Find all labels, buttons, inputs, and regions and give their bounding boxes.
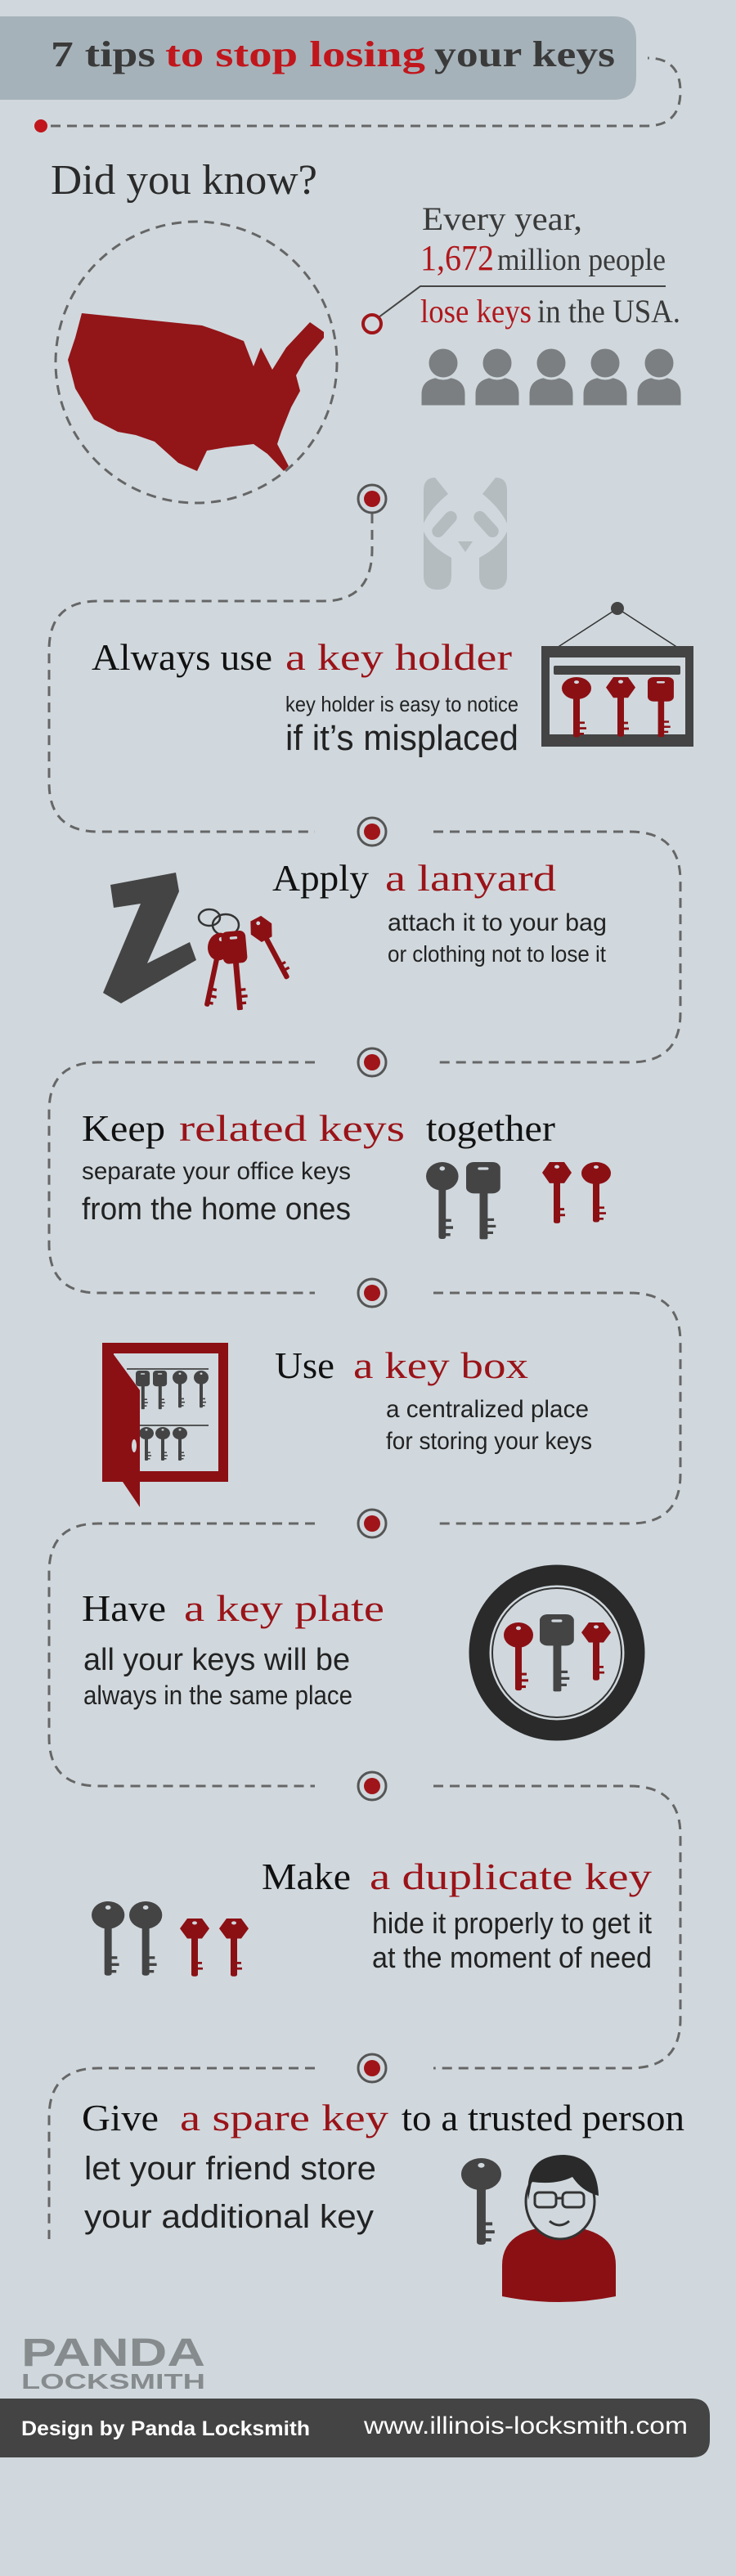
statistic text: lose keys <box>420 293 532 330</box>
tip 3: related keys: separate your office keys <box>82 1158 351 1185</box>
icon: key holder <box>541 602 693 747</box>
tip 6: duplicate key: a duplicate key <box>370 1856 652 1897</box>
tip 2: lanyard <box>272 857 607 967</box>
tip 5: key plate: always in the same place <box>83 1681 352 1710</box>
tip 7: spare key <box>82 2097 684 2235</box>
statistic text: Every year, <box>422 200 582 237</box>
targets <box>358 485 386 2082</box>
tip 5: key plate <box>82 1587 384 1710</box>
logo: panda locksmith: LOCKSMITH <box>21 2369 205 2394</box>
tip 1: key holder: Always use <box>92 636 272 678</box>
tip 3: related keys <box>82 1107 555 1227</box>
footer bar <box>0 2399 710 2457</box>
tip 2: lanyard: or clothing not to lose it <box>388 941 606 967</box>
logo: panda locksmith: PANDA <box>21 2331 205 2375</box>
tip 3: related keys: from the home ones <box>82 1192 351 1227</box>
tip 6: duplicate key: Make <box>262 1856 351 1897</box>
tip 3: related keys: Keep <box>82 1107 165 1149</box>
tip 7: spare key: to a trusted person <box>402 2097 684 2138</box>
icon: key box <box>102 1343 228 1507</box>
icon: people <box>420 348 682 406</box>
tip 6: duplicate key <box>262 1856 652 1974</box>
title: 7 tips <box>51 34 155 74</box>
tip 1: key holder <box>92 636 518 758</box>
title: to stop losing <box>165 34 425 74</box>
icon: lanyard Z with keys <box>103 873 298 1011</box>
icon: key plate <box>479 1575 635 1730</box>
tip 7: spare key: a spare key <box>180 2097 388 2138</box>
tip 1: key holder: if it’s misplaced <box>285 718 518 758</box>
tip 4: key box: Use <box>275 1344 334 1386</box>
start dot <box>34 119 47 132</box>
tip 5: key plate: all your keys will be <box>83 1643 350 1677</box>
footer bar: www.illinois-locksmith.com <box>363 2412 688 2439</box>
icon: spare key and person <box>461 2155 616 2302</box>
tip 3: related keys: related keys <box>179 1107 405 1149</box>
tip 1: key holder: a key holder <box>285 636 512 678</box>
tip 4: key box <box>275 1344 592 1455</box>
tip 6: duplicate key: at the moment of need <box>372 1941 652 1974</box>
tip 5: key plate: Have <box>82 1587 166 1629</box>
icon: duplicate keys <box>92 1901 249 1977</box>
logo: panda locksmith <box>21 2331 205 2394</box>
heading: did you know: Did you know? <box>51 157 317 204</box>
statistic text <box>363 200 680 333</box>
tip 4: key box: a key box <box>353 1344 528 1386</box>
dashed path <box>49 58 680 2239</box>
tip 7: spare key: Give <box>82 2097 159 2138</box>
tip 6: duplicate key: hide it properly to get it <box>372 1906 652 1940</box>
tip 1: key holder: key holder is easy to notice <box>285 692 518 716</box>
tip 4: key box: for storing your keys <box>386 1428 592 1455</box>
title bar <box>0 16 636 100</box>
statistic text: million people <box>497 243 666 277</box>
title: your keys <box>434 34 615 74</box>
tip 3: related keys: together <box>426 1107 555 1149</box>
tip 5: key plate: a key plate <box>184 1587 384 1629</box>
tip 7: spare key: let your friend store <box>84 2151 376 2187</box>
tip 4: key box: a centralized place <box>386 1396 589 1423</box>
map: USA <box>68 313 324 471</box>
tip 2: lanyard: a lanyard <box>385 857 556 899</box>
statistic text: 1,672 <box>420 238 494 278</box>
icon: panda <box>424 478 507 590</box>
tip 2: lanyard: Apply <box>272 857 369 899</box>
statistic text: in the USA. <box>537 293 680 330</box>
tip 7: spare key: your additional key <box>84 2199 374 2235</box>
tip 2: lanyard: attach it to your bag <box>388 909 607 936</box>
footer bar: Design by Panda Locksmith <box>21 2417 310 2440</box>
icon: related keys <box>426 1162 611 1239</box>
